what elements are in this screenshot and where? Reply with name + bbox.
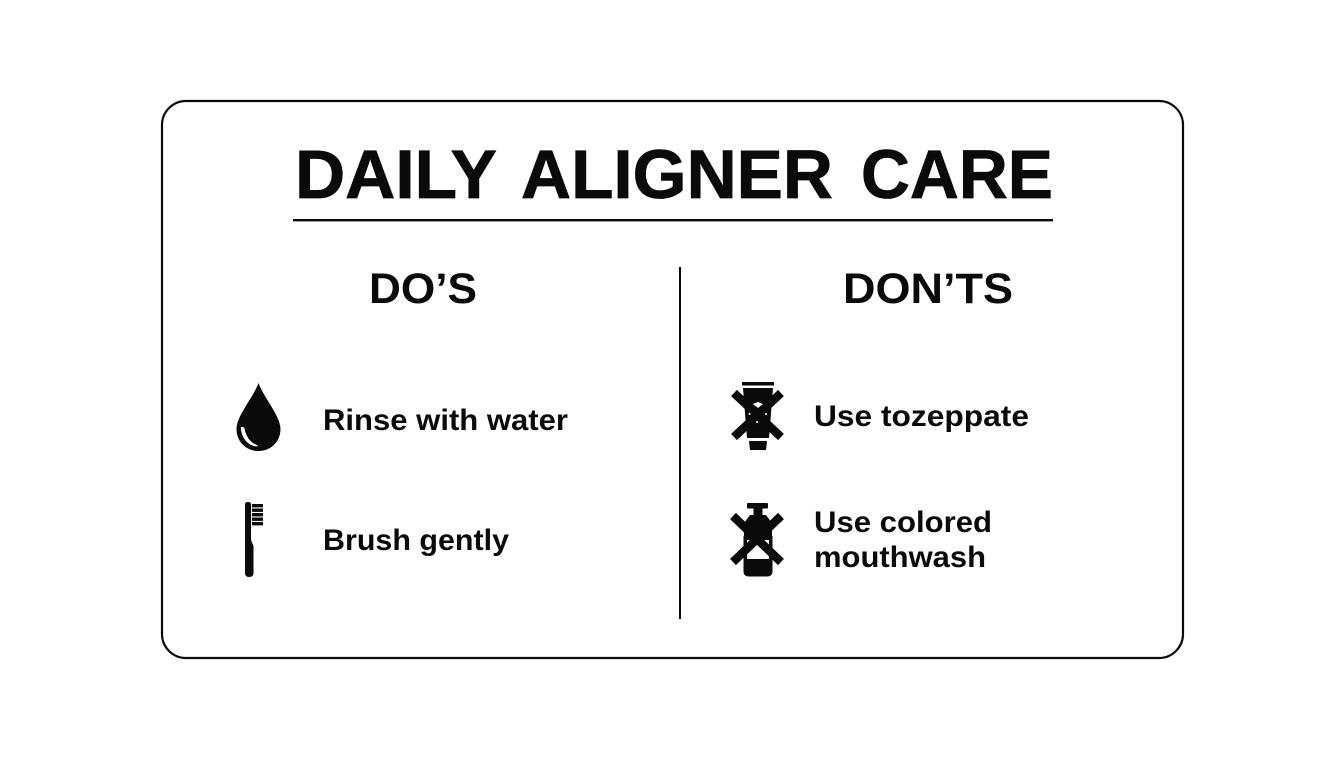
icon: crossed-out toothpaste (734, 382, 781, 450)
text: use colored mouthwash: Use colored (814, 506, 992, 539)
text: brush gently: Brush gently (323, 524, 509, 557)
heading: don'ts: DON’TS (843, 265, 1013, 313)
icon: crossed-out mouthwash bottle (733, 503, 781, 576)
column divider (679, 267, 681, 619)
icon: water drop (236, 383, 280, 451)
icon: toothbrush (245, 502, 263, 577)
text: use colored mouthwash (814, 506, 992, 574)
panel: card outline (162, 101, 1183, 658)
heading: do's: DO’S (369, 265, 477, 313)
title: DAILY (295, 136, 497, 213)
text: rinse with water: Rinse with water (323, 404, 568, 437)
title (295, 136, 1053, 213)
title: ALIGNER (521, 136, 833, 213)
title underline (293, 219, 1053, 221)
text: use toothpaste: Use tozeppate (814, 400, 1029, 433)
text: use colored mouthwash: mouthwash (814, 541, 986, 574)
title: CARE (861, 136, 1053, 213)
